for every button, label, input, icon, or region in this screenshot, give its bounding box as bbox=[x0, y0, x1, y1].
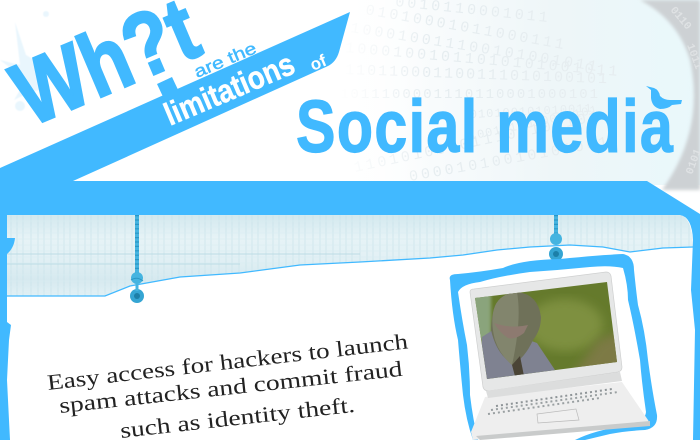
binary tunnel background: 0110 bbox=[667, 5, 693, 33]
binary tunnel background: 010100101010011 bbox=[469, 102, 593, 122]
keyboard bbox=[496, 389, 612, 406]
icon: bird bbox=[646, 86, 682, 109]
heading: Social media: Social media bbox=[296, 86, 673, 169]
binary tunnel background: 1001011010010101 bbox=[468, 103, 599, 144]
rope left bbox=[130, 215, 144, 303]
binary tunnel background: 00001010010101001 bbox=[408, 134, 612, 186]
body text: spam attacks and commit fraud bbox=[58, 356, 404, 418]
screen photo: masked hacker bbox=[475, 282, 617, 379]
splash decoration bbox=[0, 11, 50, 111]
body text bbox=[46, 328, 409, 440]
laptop bbox=[470, 272, 650, 440]
touchpad bbox=[537, 409, 579, 423]
photo frame bbox=[450, 254, 657, 440]
binary tunnel background: 110110001100111010100101 bbox=[345, 62, 609, 88]
binary tunnel background: 10001001011010101001011 bbox=[345, 40, 621, 81]
heading: limitations: limitations bbox=[159, 45, 300, 132]
laptop lid bbox=[470, 272, 622, 391]
binary tunnel background: 100010011100101001011 bbox=[349, 20, 601, 76]
binary tunnel background bbox=[340, 0, 700, 190]
body text: Easy access for hackers to launch bbox=[46, 328, 409, 395]
banner ribbon bbox=[0, 12, 350, 181]
heading: of: of bbox=[307, 51, 330, 75]
laptop base bbox=[471, 382, 650, 440]
torn grid paper bbox=[7, 215, 693, 296]
heading: are the: are the bbox=[191, 38, 259, 82]
binary tunnel background: 1011100001110110001000101 bbox=[340, 87, 600, 103]
binary tunnel background: 110101001011100100101 bbox=[353, 108, 603, 177]
blue board frame bbox=[0, 181, 700, 440]
binary tunnel background: 01010001011000111 bbox=[364, 2, 568, 54]
rope right bbox=[549, 215, 563, 261]
